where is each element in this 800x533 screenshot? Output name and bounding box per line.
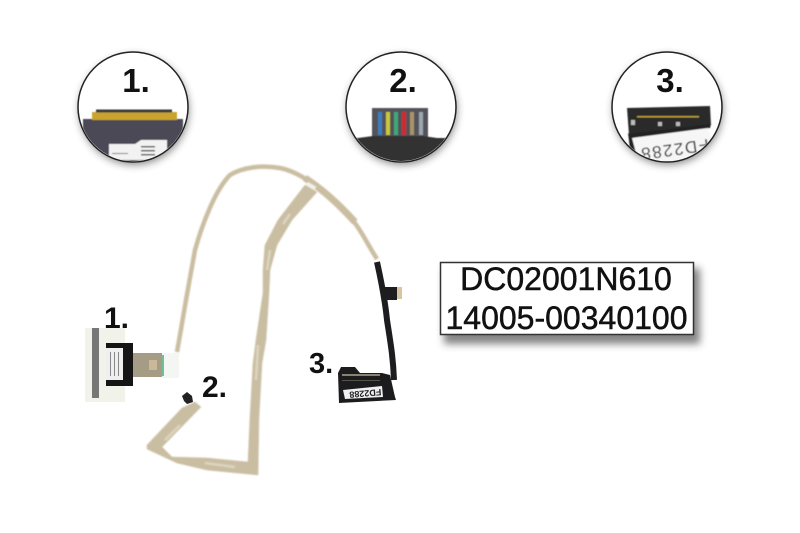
part number 2: 14005-00340100 (445, 300, 688, 336)
label: 3. callout: 3. (309, 348, 333, 380)
label: 2.: 2. (389, 62, 417, 99)
label: 1. callout: 1. (104, 302, 129, 335)
thin cable (177, 167, 377, 352)
connector 3 (338, 367, 396, 403)
detail circle 3 (612, 52, 723, 176)
black cable section (338, 262, 402, 403)
label: 1.: 1. (122, 62, 150, 99)
connector 3: FD2288 (349, 387, 382, 400)
connector 1 assembly (85, 328, 179, 402)
part number box (440, 261, 700, 344)
label: 2. callout: 2. (202, 371, 227, 404)
wide ribbon cable (147, 182, 317, 475)
connector 2 (182, 392, 193, 404)
part number 1: DC02001N610 (460, 261, 672, 297)
detail circle 2 (340, 52, 457, 168)
detail circle 1 (78, 52, 189, 169)
label: FD2288: FD2288 (639, 135, 710, 164)
label: 3.: 3. (656, 62, 684, 99)
